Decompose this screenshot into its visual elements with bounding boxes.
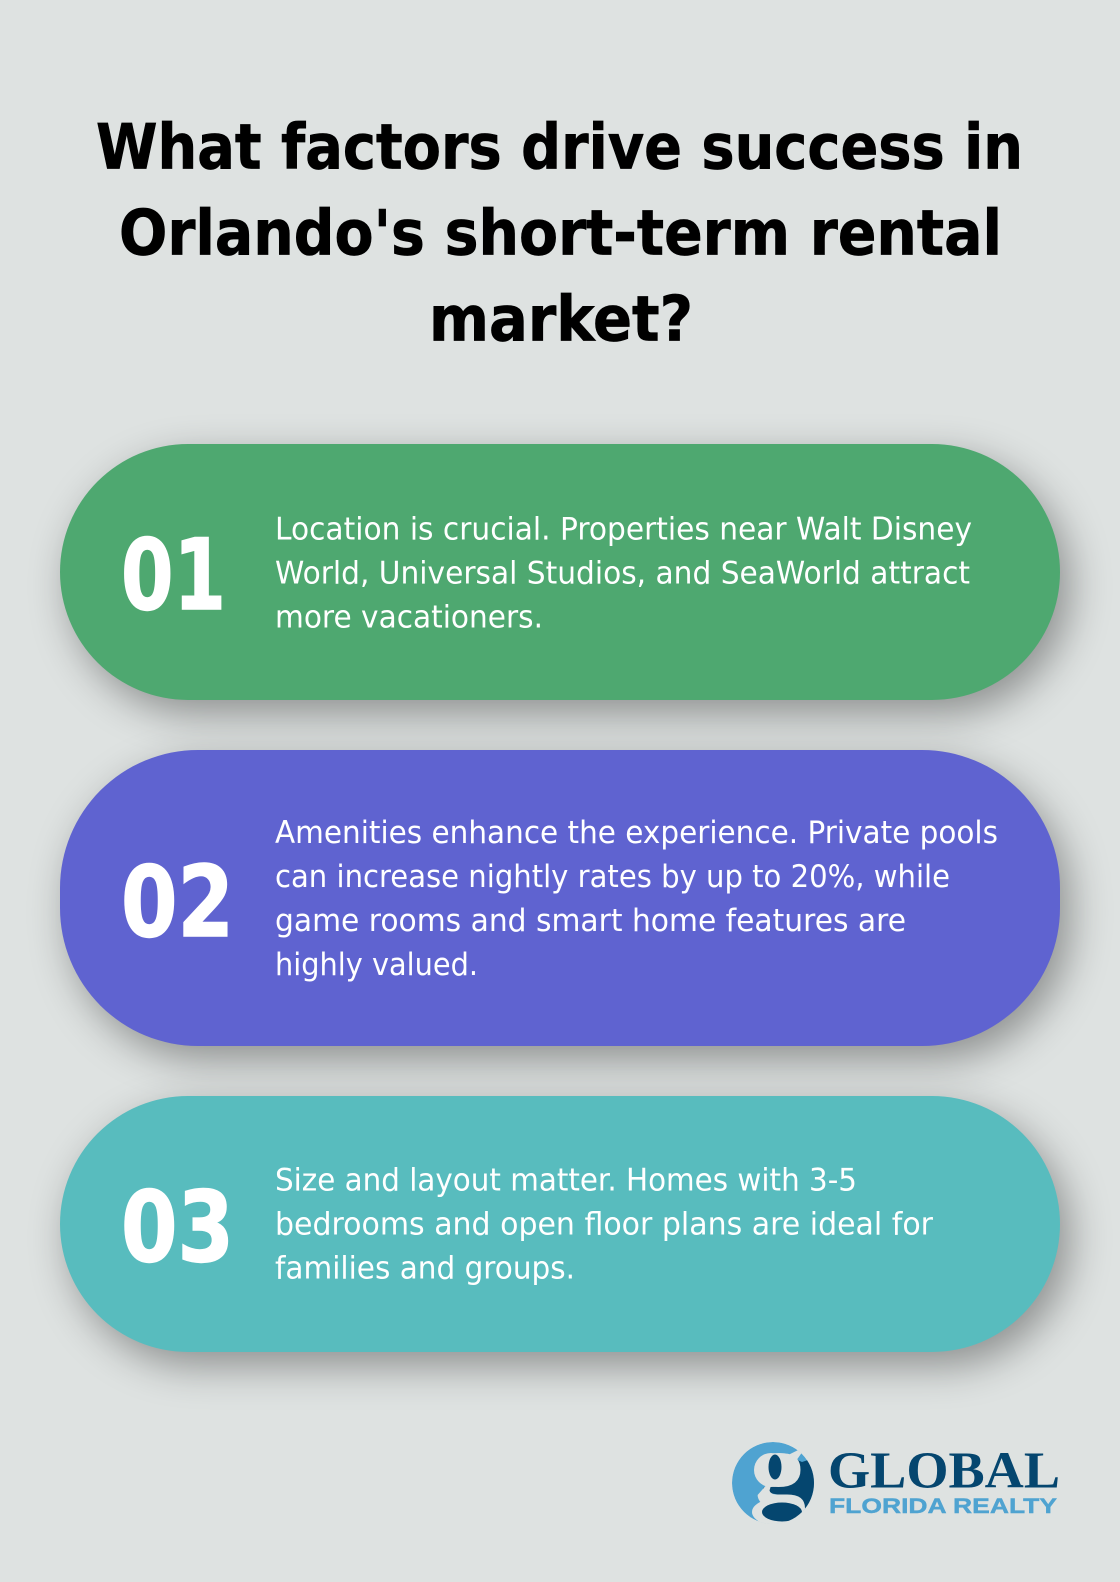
number 02: 02: [121, 846, 234, 960]
logo: Global Florida Realty: [732, 1442, 1058, 1524]
pill background: [60, 750, 1060, 1046]
text: location: World, Universal Studios, and SeaWorld attract: [275, 556, 970, 592]
text: location: Location is crucial. Properties near Walt Disney: [275, 512, 972, 548]
icon: g monogram: [732, 1442, 814, 1524]
text: size and layout: bedrooms and open floor plans are ideal for: [275, 1206, 933, 1242]
number 03: 03: [121, 1171, 234, 1285]
text: amenities: Amenities enhance the experience. Private pools: [275, 815, 998, 851]
number 01: 01: [121, 519, 226, 633]
text: size and layout: [275, 1162, 933, 1286]
text: amenities: game rooms and smart home features are: [275, 903, 906, 939]
title: [96, 110, 1023, 356]
title: What factors drive success in: [96, 110, 1023, 184]
title: Orlando's short-term rental: [119, 196, 1002, 270]
text: size and layout: Size and layout matter. Homes with 3-5: [275, 1162, 857, 1198]
title: market?: [429, 282, 693, 356]
pill background: [60, 444, 1060, 700]
text: location: [275, 512, 972, 636]
wordmark GLOBAL: GLOBAL: [828, 1442, 1060, 1500]
text: location: more vacationers.: [275, 600, 543, 636]
panel: factor 01 location: [60, 444, 1060, 700]
text: size and layout: families and groups.: [275, 1250, 575, 1286]
wordmark FLORIDA REALTY: FLORIDA REALTY: [829, 1495, 1057, 1518]
panel: factor 02 amenities: [60, 750, 1060, 1046]
pill background: [60, 1096, 1060, 1352]
text: amenities: highly valued.: [275, 947, 478, 983]
panel: factor 03 size and layout: [60, 1096, 1060, 1352]
text: amenities: can increase nightly rates by up to 20%, while: [275, 859, 950, 895]
text: amenities: [275, 815, 998, 983]
icon: g monogram: g: [753, 1409, 806, 1526]
